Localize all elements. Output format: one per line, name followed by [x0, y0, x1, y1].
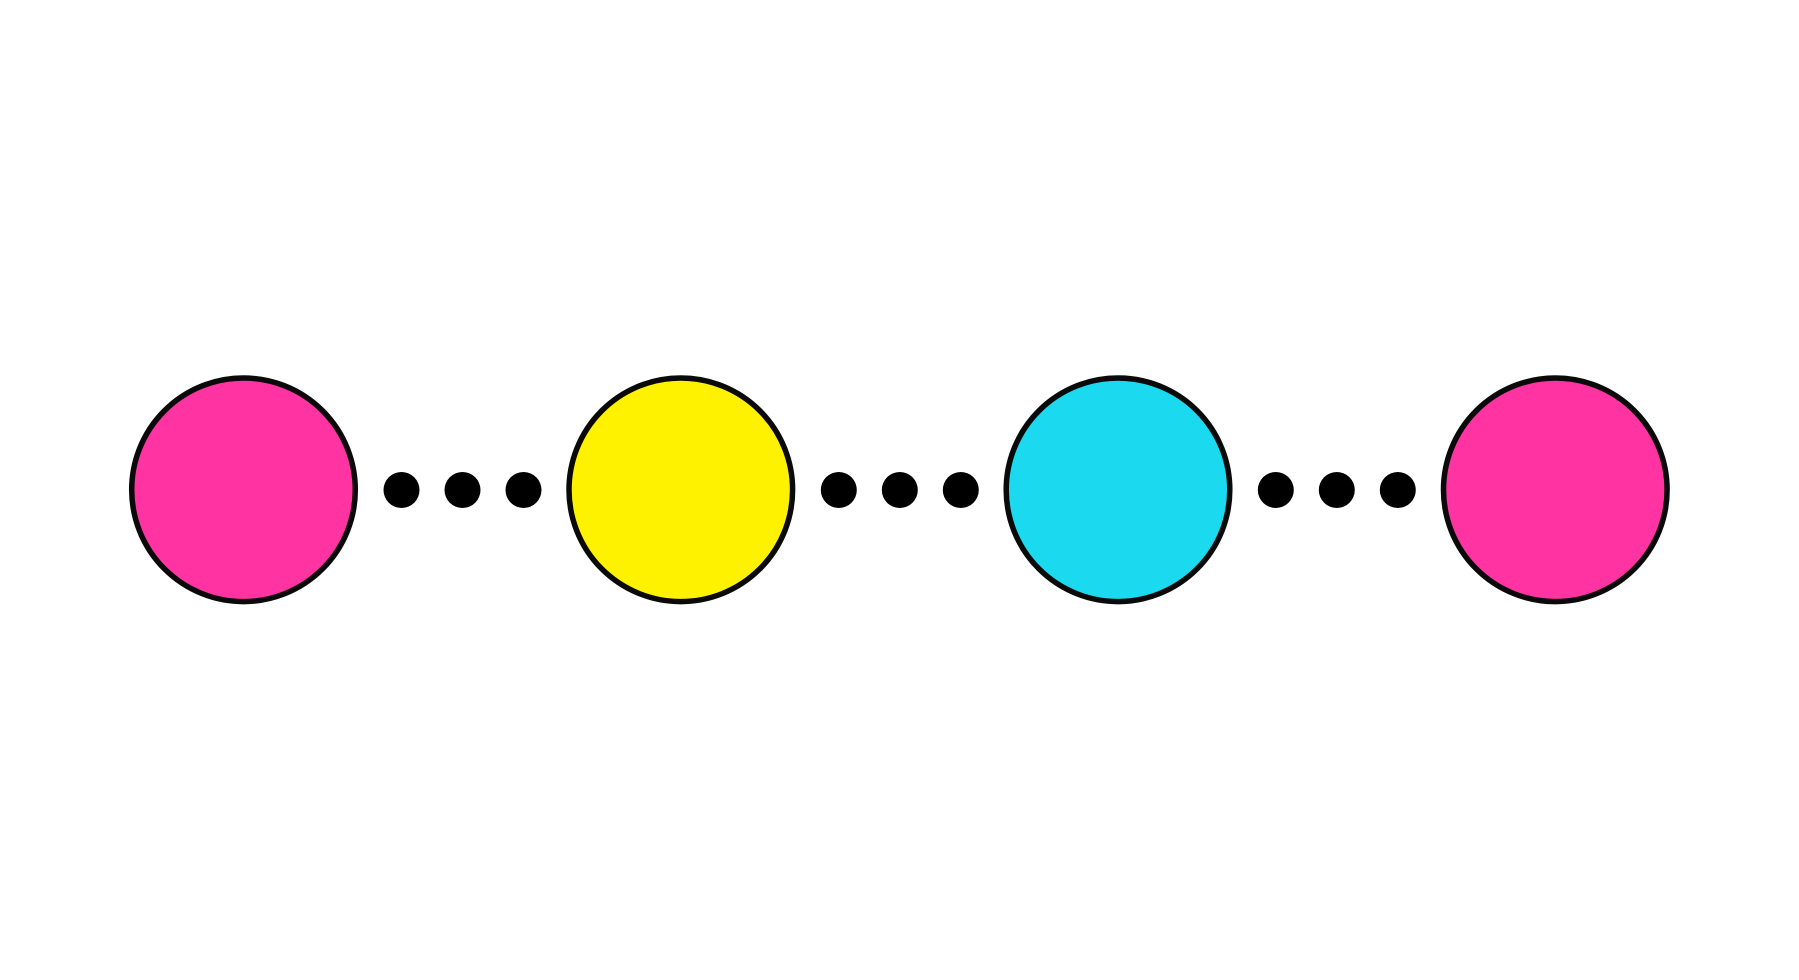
circle: cyan [1006, 378, 1230, 602]
dots: connector 3 [1258, 472, 1416, 508]
dots: connector 2 [821, 472, 979, 508]
dots: connector 1 [384, 472, 542, 508]
circle: pink right [1444, 378, 1667, 602]
circle: yellow [569, 378, 793, 602]
circle: pink left [132, 378, 355, 602]
